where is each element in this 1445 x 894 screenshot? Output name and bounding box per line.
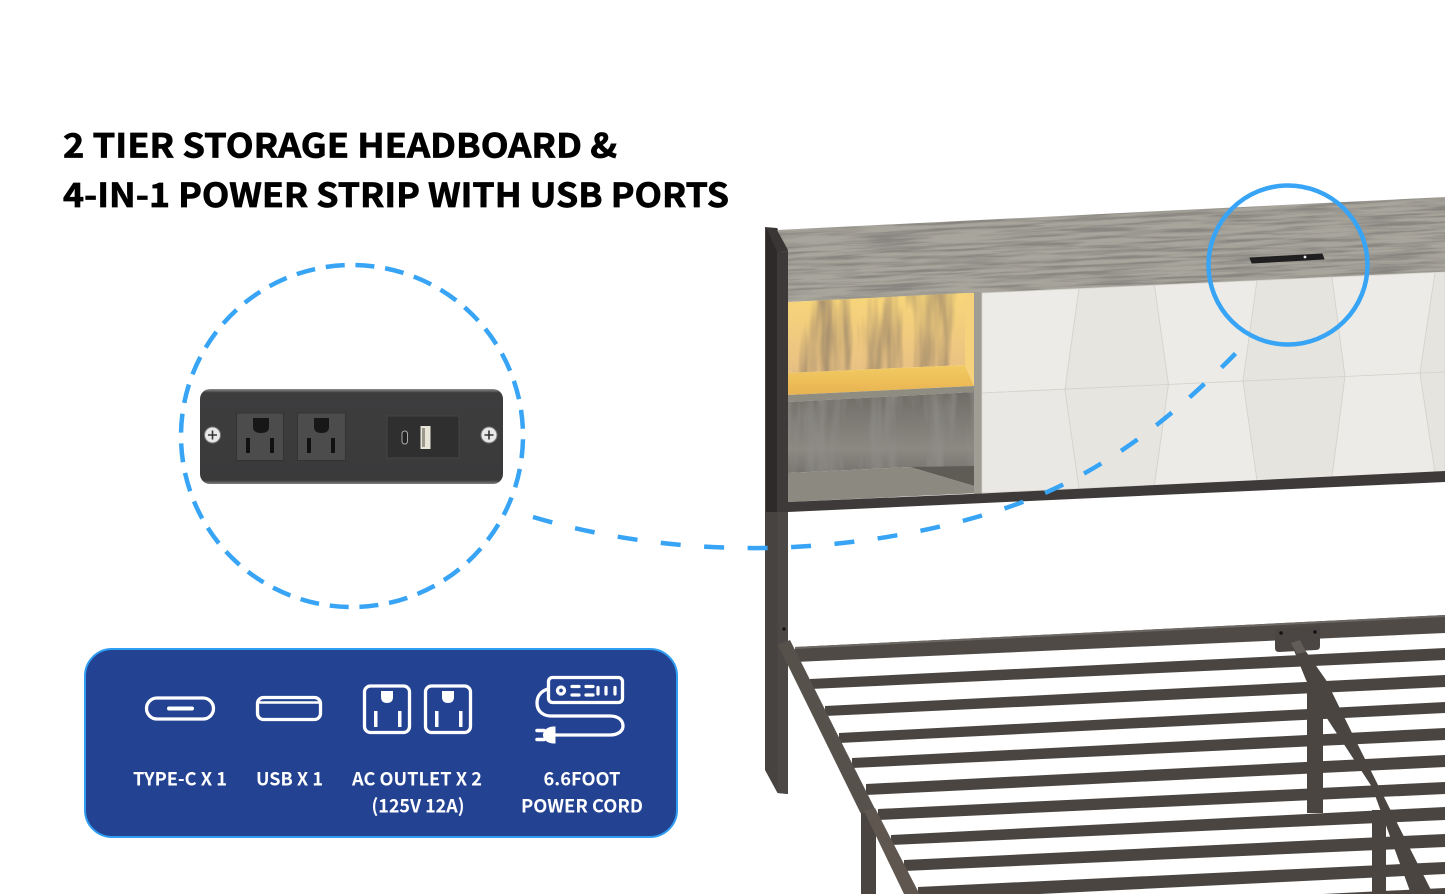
bracket [1275, 626, 1320, 654]
label: ac outlet: (125V 12A) [372, 792, 464, 818]
side rail [778, 640, 920, 894]
screw right [481, 427, 497, 443]
dashed leader line [533, 353, 1236, 548]
power slot on headboard [1250, 254, 1324, 263]
label: ac outlet [351, 766, 482, 818]
label: type-c: TYPE-C X 1 [133, 766, 227, 792]
label: usb: USB X 1 [256, 766, 323, 792]
headboard [777, 197, 1445, 512]
features panel [85, 649, 677, 837]
bed slats [810, 648, 1445, 894]
power strip [200, 389, 503, 484]
wood top board [777, 197, 1445, 302]
outlet 2 [298, 413, 346, 460]
label: ac outlet: AC OUTLET X 2 [351, 766, 482, 792]
icon: ac outlet 1 [364, 686, 410, 732]
highlight circle [1208, 186, 1368, 344]
screw left [204, 427, 220, 443]
bottom frame bar [788, 471, 1445, 512]
partition [974, 292, 982, 494]
outlet 1 [236, 413, 284, 460]
icon: ac outlet 2 [426, 686, 470, 732]
title: 2 TIER STORAGE HEADBOARD & [63, 120, 617, 168]
center support rail [1291, 643, 1433, 894]
icon: type-c [146, 698, 214, 719]
back rail [795, 615, 1445, 662]
dashed zoom circle [181, 265, 523, 607]
label: power cord [521, 766, 643, 818]
bed frame [765, 227, 1445, 894]
icon: power cord [537, 678, 623, 744]
lit shelf [788, 293, 974, 402]
lower shelf [788, 392, 981, 502]
headboard post [765, 227, 788, 794]
usb module [387, 416, 459, 458]
title: 4-IN-1 POWER STRIP WITH USB PORTS [63, 169, 729, 217]
upholstered panels [982, 272, 1445, 493]
title [63, 120, 729, 217]
icon: usb [258, 698, 320, 720]
label: power cord: 6.6FOOT [544, 766, 620, 792]
label: power cord: POWER CORD [521, 792, 643, 818]
